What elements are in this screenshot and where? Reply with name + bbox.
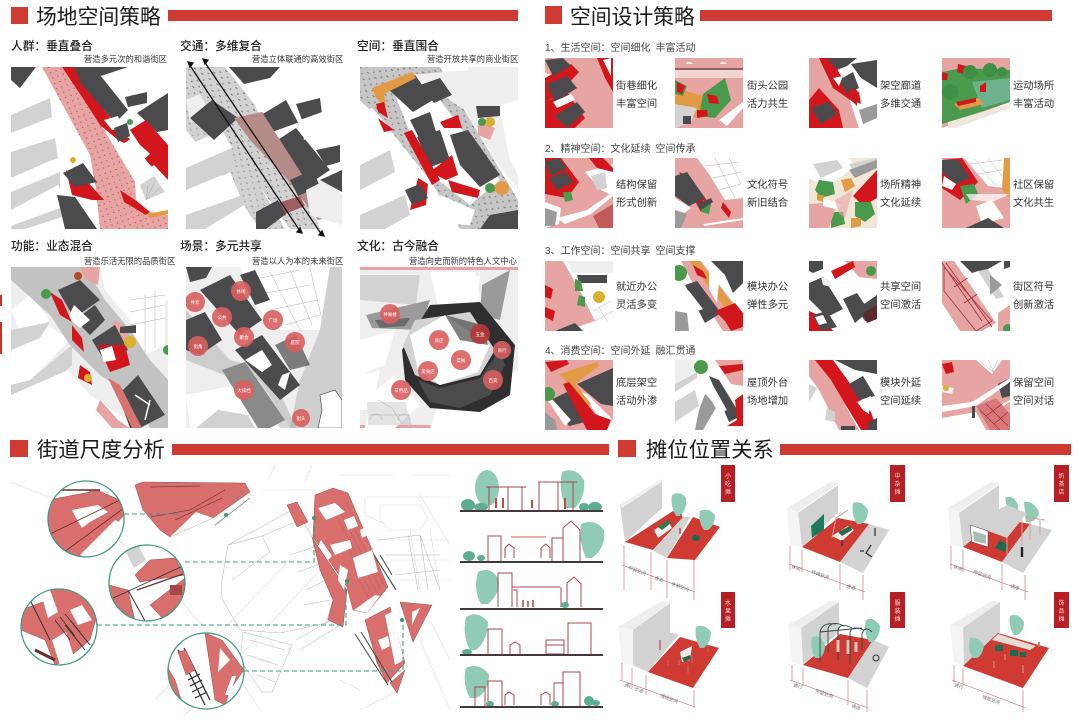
subtitle: 营造开放共享的商业街区 xyxy=(427,54,518,64)
thumbnail: 架空廊道 xyxy=(809,58,877,128)
thumbnail: 模块外延 xyxy=(809,360,877,430)
tag xyxy=(1054,592,1069,628)
aerial view: 庭院 xyxy=(290,339,300,346)
aerial view: 街角 xyxy=(194,343,202,350)
aerial view xyxy=(11,67,168,229)
aerial view xyxy=(186,67,342,229)
section: 工作空间 xyxy=(545,244,1054,334)
stall diagram: 服装摊: 通行 xyxy=(792,681,804,691)
caption: 新旧结合 xyxy=(747,196,788,209)
caption: 模块外延 xyxy=(880,377,921,389)
section 2 xyxy=(460,521,604,563)
stall diagram: 饰品摊: 通行 xyxy=(953,681,965,691)
section: 生活空间 xyxy=(545,41,1054,128)
label: 场景：多元共享 xyxy=(180,239,262,253)
tag: 水 xyxy=(725,599,731,607)
caption: 活动外渗 xyxy=(616,394,657,407)
aerial view: 空间 xyxy=(360,67,518,229)
stall diagram: 奶茶店: 休闲 xyxy=(952,563,964,573)
caption: 活力共生 xyxy=(747,97,788,110)
aerial view: 街头 xyxy=(296,415,306,422)
aerial view: 聚会 xyxy=(240,334,249,341)
pink block: south xyxy=(355,602,432,693)
section label: 2、精神空间：文化延续 空间传承 xyxy=(545,142,696,155)
aerial view: 日用品 xyxy=(394,388,408,394)
tag: 摊 xyxy=(1058,615,1065,623)
stall diagram: 饰品摊: 摊贩空间 xyxy=(981,693,1001,706)
caption: 空间对话 xyxy=(1013,394,1054,407)
caption: 屋顶外台 xyxy=(747,376,788,389)
section 3 xyxy=(460,570,603,610)
subtitle: 营造向史而新的特色人文中心 xyxy=(409,256,518,266)
tag: 小 xyxy=(725,472,731,480)
aerial view xyxy=(11,267,168,428)
tag: 摊 xyxy=(894,488,901,496)
stall diagram: 饰品摊 xyxy=(950,592,1069,712)
tag: 装 xyxy=(894,607,901,615)
panel: 文化 古今融合 xyxy=(357,239,520,428)
aerial view: 共享 xyxy=(190,299,200,306)
thumbnail: 场所精神 xyxy=(809,158,877,228)
heading: 摊位位置关系 xyxy=(618,438,1071,462)
aerial view: 菜摊 xyxy=(456,357,466,364)
detail circle 1 xyxy=(48,481,124,560)
caption: 场所精神 xyxy=(880,178,921,191)
caption: 就近办公 xyxy=(616,280,657,293)
caption: 共享空间 xyxy=(880,280,921,293)
aerial view xyxy=(360,267,518,428)
section 5 xyxy=(460,666,603,708)
stall diagram: 服装摊: 停留空间 xyxy=(814,687,834,700)
section 4 xyxy=(460,614,603,656)
section: 精神空间 xyxy=(545,142,1054,228)
caption: 文化延续 xyxy=(880,196,921,209)
caption: 多维交通 xyxy=(880,97,921,110)
tag: 饰 xyxy=(1058,599,1065,607)
caption: 形式创新 xyxy=(616,196,657,209)
stall diagram: 奶茶店: 通道 xyxy=(1009,582,1021,592)
tag xyxy=(890,465,905,502)
caption: 运动场所 xyxy=(1013,79,1054,92)
tag: 摊 xyxy=(894,615,901,623)
stall diagram: 小吃摊: 停留空间 xyxy=(627,564,647,577)
caption: 模块办公 xyxy=(747,280,788,293)
stall diagram: 水果摊: 通行 xyxy=(623,681,635,691)
stall diagram: 小吃摊: 休憩空间 xyxy=(670,580,690,593)
tag xyxy=(890,592,905,628)
section label: 3、工作空间：空间共享 空间支撑 xyxy=(545,244,696,257)
stall diagram: 小吃摊: 通道 xyxy=(653,574,665,584)
connector lines xyxy=(97,514,403,671)
thumbnail: 底层架空 xyxy=(545,360,613,430)
stall diagram: 中杂摊 xyxy=(787,465,905,600)
caption: 空间激活 xyxy=(880,298,921,311)
tag: 奶 xyxy=(1058,472,1065,480)
caption: 街区符号 xyxy=(1013,280,1054,293)
heading: 摊位位置关系: 摊位位置关系 xyxy=(646,438,774,462)
detail circle 2 xyxy=(109,545,185,621)
section label: 4、消费空间：空间外延 融汇贯通 xyxy=(545,344,696,357)
aerial view: 大排档 xyxy=(237,387,251,394)
caption: 底层架空 xyxy=(616,376,657,389)
aerial view: 公共 xyxy=(218,314,227,321)
edge marks xyxy=(0,295,2,354)
stall diagram: 服装摊 xyxy=(788,592,905,712)
heading: 街道尺度分析 xyxy=(10,438,609,462)
tag: 店 xyxy=(1058,488,1065,496)
detail circle 3 xyxy=(21,589,97,665)
aerial view: 五金 xyxy=(476,331,485,337)
aerial view: 百货 xyxy=(488,377,498,384)
tag xyxy=(721,592,735,628)
caption: 空间延续 xyxy=(880,394,921,407)
panel: 功能 业态混合 xyxy=(11,239,175,428)
caption: 丰富活动 xyxy=(1013,97,1054,110)
subtitle: 营造多元次的和谐街区 xyxy=(84,54,167,64)
detail circle 4 xyxy=(168,633,244,709)
heading: 空间设计策略 xyxy=(545,6,1052,29)
stall diagram: 水果摊: 摊贩空间 xyxy=(659,692,679,705)
thumbnail: 文化符号 xyxy=(675,158,743,228)
tag xyxy=(721,465,735,502)
thumbnail: 共享空间 xyxy=(809,261,877,331)
thumbnail: 街区符号 xyxy=(942,261,1010,331)
thumbnail: 保留空间 xyxy=(942,360,1010,430)
caption: 结构保留 xyxy=(616,178,657,191)
stall diagram: 水果摊 xyxy=(618,592,735,708)
caption: 文化共生 xyxy=(1013,196,1054,209)
caption: 场地增加 xyxy=(747,394,788,407)
tag: 摊 xyxy=(725,488,731,496)
caption: 弹性多元 xyxy=(747,298,788,311)
tag: 中 xyxy=(894,472,901,480)
caption: 保留空间 xyxy=(1013,376,1054,389)
caption: 创新激活 xyxy=(1013,298,1054,311)
thumbnail: 结构保留 xyxy=(545,158,613,228)
thumbnail: 就近办公 xyxy=(545,261,613,331)
stall diagram: 小吃摊 xyxy=(620,465,735,600)
tag: 果 xyxy=(725,608,731,615)
pink block: north xyxy=(135,482,250,537)
tag xyxy=(1054,465,1069,502)
panel: 人群 垂直叠合 xyxy=(11,39,168,229)
label: 空间：垂直围合 xyxy=(357,39,439,53)
section 1 xyxy=(460,470,603,512)
stall diagram: 奶茶店: 停留空间 xyxy=(972,568,992,581)
heading: 街道尺度分析: 街道尺度分析 xyxy=(37,438,165,462)
stall diagram: 中杂摊: 休闲 xyxy=(790,563,802,573)
aerial view: 美食店 xyxy=(421,368,435,375)
stall diagram: 奶茶店 xyxy=(948,465,1069,600)
subtitle: 营造立体联通的高效街区 xyxy=(252,54,343,64)
label: 交通：多维复合 xyxy=(180,39,262,53)
aerial view: 商店 xyxy=(434,337,444,344)
tag: 茶 xyxy=(1058,480,1065,488)
tag: 杂 xyxy=(894,481,901,488)
subtitle: 营造以人为本的未来街区 xyxy=(252,256,343,266)
panel: 场景 多元共享 xyxy=(180,239,343,428)
stall diagram: 中杂摊: 移摊空间 xyxy=(810,568,830,581)
tag: 吃 xyxy=(725,480,731,488)
stall diagram: 中杂摊: 通道 xyxy=(845,582,857,592)
heading: 空间设计策略: 空间设计策略 xyxy=(570,6,695,29)
caption: 街头公园 xyxy=(747,79,788,92)
heading: 场地空间策略: 场地空间策略 xyxy=(36,6,161,29)
panel: 交通 多维复合 xyxy=(180,39,518,236)
thumbnail: 街头公园 xyxy=(675,58,743,128)
caption: 街巷细化 xyxy=(616,79,657,92)
aerial view xyxy=(186,267,342,428)
street scale map xyxy=(10,465,450,715)
label: 人群：垂直叠合 xyxy=(11,39,93,53)
thumbnail: 屋顶外台 xyxy=(675,360,743,430)
aerial view: 商行 xyxy=(498,347,507,354)
caption: 文化符号 xyxy=(747,178,788,191)
stall diagram: 服装摊: 通道 xyxy=(850,702,862,712)
heading: 场地空间策略 xyxy=(11,6,518,29)
caption: 灵活多变 xyxy=(616,298,657,311)
aerial view: 广场 xyxy=(268,317,278,324)
aerial view: 神阁楼 xyxy=(383,311,397,318)
pink block: central xyxy=(224,488,404,627)
label: 功能：业态混合 xyxy=(11,239,93,253)
thumbnail: 街巷细化 xyxy=(545,58,613,128)
thumbnail: 模块办公 xyxy=(675,261,743,331)
section: 消费空间 xyxy=(541,344,1054,430)
street sections xyxy=(460,470,604,708)
caption: 社区保留 xyxy=(1013,178,1054,191)
tag: 摊 xyxy=(725,615,731,623)
label: 文化：古今融合 xyxy=(357,239,439,253)
thumbnail: 运动场所 xyxy=(942,58,1010,128)
tag: 品 xyxy=(1058,608,1065,615)
tag: 服 xyxy=(894,600,901,607)
caption: 丰富空间 xyxy=(616,97,657,110)
subtitle: 营造乐活无限的品质街区 xyxy=(84,256,175,266)
caption: 架空廊道 xyxy=(880,79,921,92)
aerial view: 休闲 xyxy=(236,288,246,295)
arrow: traffic axes xyxy=(188,59,324,236)
section label: 1、生活空间：空间细化 丰富活动 xyxy=(545,41,696,54)
stall diagram: 水果摊: 步道 xyxy=(633,685,645,695)
thumbnail: 社区保留 xyxy=(942,158,1010,228)
